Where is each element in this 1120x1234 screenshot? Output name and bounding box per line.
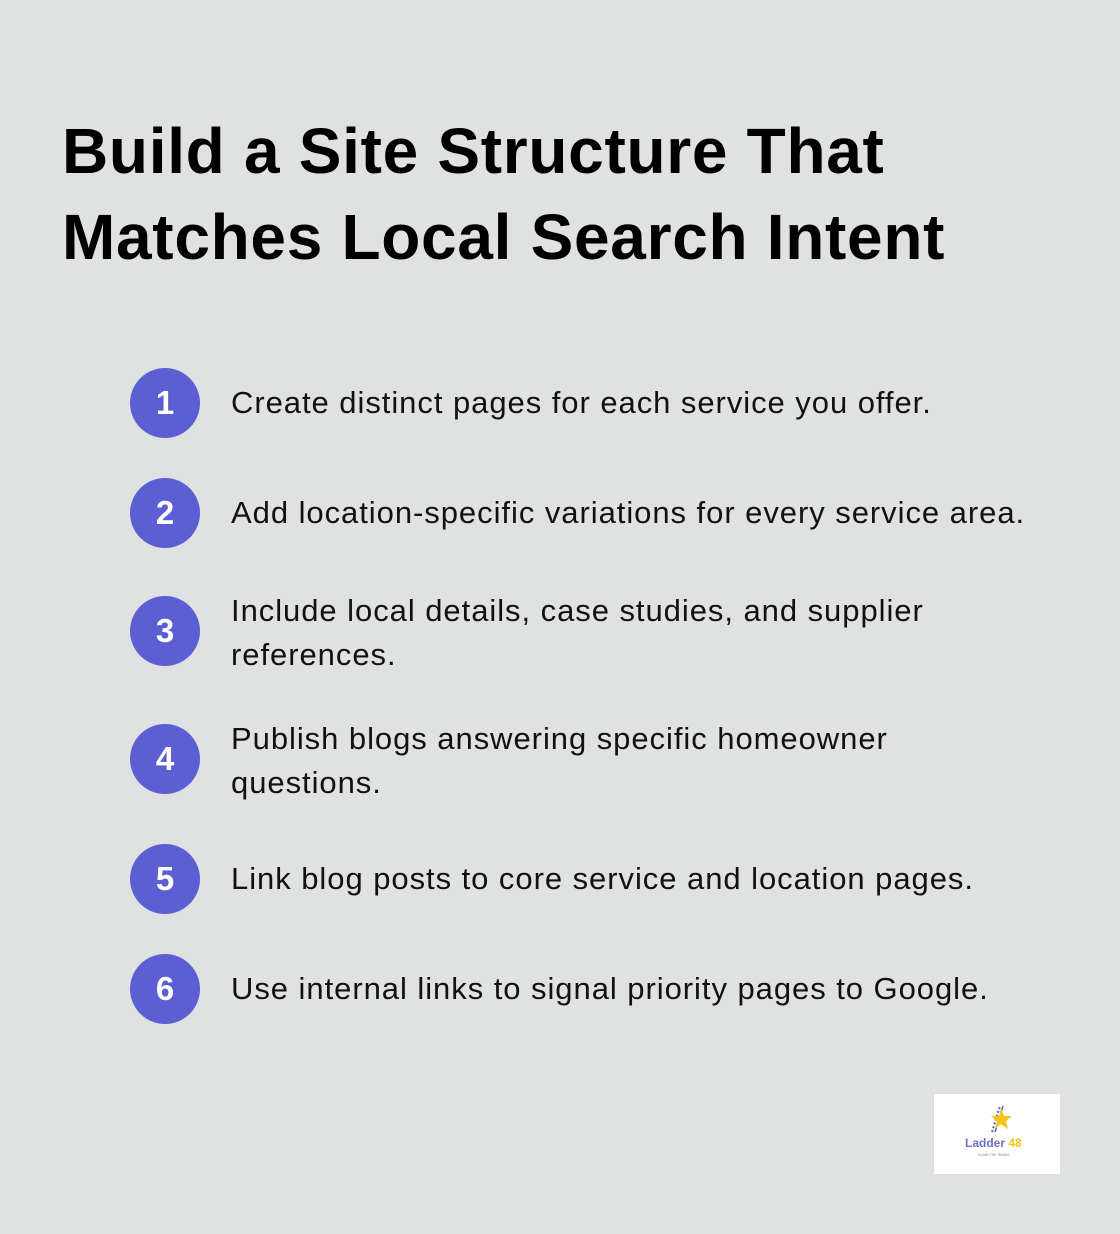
text: Use internal links to signal priority pages to Google. <box>231 971 989 1006</box>
title: Build a Site Structure That <box>62 115 885 187</box>
text: Create distinct pages for each service you offer. <box>231 385 932 420</box>
step 3 <box>130 593 924 672</box>
title <box>62 115 945 273</box>
step 2 <box>130 478 1025 548</box>
step 1 <box>130 368 932 438</box>
text: Add location-specific variations for every service area. <box>231 495 1025 530</box>
logo: CLIMB THE RANKS <box>978 1153 1010 1157</box>
text: 6 <box>156 970 174 1007</box>
logo: Ladder 48 <box>965 1136 1022 1150</box>
text: 5 <box>156 860 174 897</box>
icon: ladder star <box>991 1106 1012 1132</box>
text: Include local details, case studies, and supplier <box>231 593 924 628</box>
step 6 <box>130 954 989 1024</box>
logo <box>934 1094 1060 1174</box>
text: 3 <box>156 612 174 649</box>
text: 4 <box>156 740 174 777</box>
step 5 <box>130 844 974 914</box>
text: references. <box>231 637 397 672</box>
text: 1 <box>156 384 174 421</box>
step 4 <box>130 721 888 800</box>
text: 2 <box>156 494 174 531</box>
text: Link blog posts to core service and location pages. <box>231 861 974 896</box>
text: Publish blogs answering specific homeowner <box>231 721 888 756</box>
text: questions. <box>231 765 382 800</box>
title: Matches Local Search Intent <box>62 201 945 273</box>
